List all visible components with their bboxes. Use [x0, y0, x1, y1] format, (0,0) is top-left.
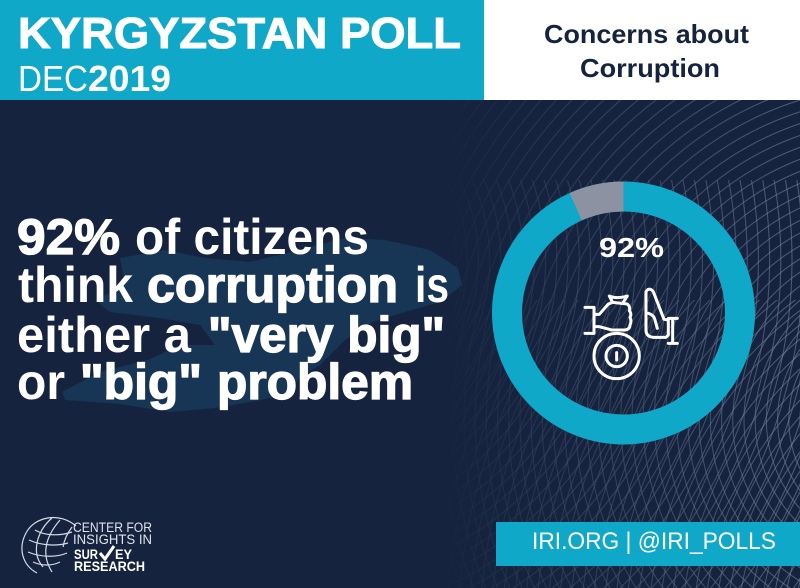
- topic heading: [544, 19, 749, 83]
- main statement: [17, 209, 449, 410]
- date: 2019: [88, 58, 171, 99]
- main statement: corruption: [147, 257, 398, 313]
- logo globe: [22, 518, 76, 573]
- logo: Center for Insights in Survey Research: [22, 518, 152, 574]
- logo text: EY: [115, 547, 132, 562]
- donut chart: 92%: [507, 196, 740, 430]
- header panel: topic: [484, 0, 800, 100]
- map of Kyrgyzstan silhouette: [62, 238, 462, 412]
- main statement: think: [18, 257, 133, 313]
- logo text: SUR: [74, 547, 98, 562]
- main statement: or: [17, 354, 65, 410]
- main statement: is: [415, 257, 449, 313]
- logo text: CENTER FOR: [73, 520, 152, 535]
- header banner: teal: [0, 0, 484, 100]
- topic heading: Corruption: [580, 53, 720, 83]
- logo text: INSIGHTS IN: [73, 532, 152, 547]
- icon: hand giving money bag, refusing hand: [585, 289, 677, 379]
- main statement: 92%: [17, 209, 120, 265]
- main statement: "very big": [208, 307, 445, 363]
- date: [18, 58, 171, 99]
- main statement: either a: [17, 307, 192, 363]
- logo check mark: [100, 546, 114, 559]
- background line pattern: [471, 100, 800, 588]
- footer text: IRI.ORG | @IRI_POLLS: [532, 528, 776, 555]
- main statement: of citizens: [135, 209, 369, 265]
- donut value: 92%: [599, 232, 664, 263]
- logo text: [73, 520, 152, 574]
- date: DEC: [18, 58, 88, 99]
- footer link bar: [496, 522, 800, 566]
- topic heading: Concerns about: [544, 19, 749, 49]
- main statement: "big": [80, 354, 202, 410]
- logo text: RESEARCH: [74, 559, 145, 574]
- title: KYRGYZSTAN POLL: [18, 9, 461, 58]
- main statement: problem: [217, 354, 413, 410]
